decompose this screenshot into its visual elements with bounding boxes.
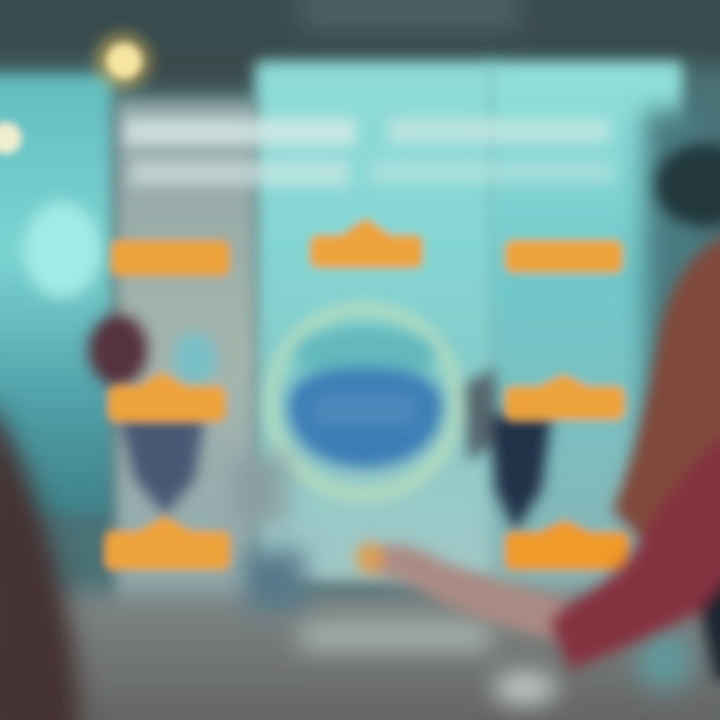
dark figure: left person xyxy=(88,314,217,515)
floor xyxy=(0,592,720,720)
right wall shadow xyxy=(645,110,705,510)
left hand blur xyxy=(232,455,305,610)
pill: top centre xyxy=(310,218,423,268)
panel: left grey xyxy=(116,100,256,610)
pill: middle right xyxy=(505,374,625,420)
dark figure: right person xyxy=(462,368,552,532)
pill: bottom left xyxy=(105,516,231,570)
top dark band xyxy=(0,0,720,90)
pill: top left xyxy=(111,240,230,276)
heading: blurred title lines xyxy=(124,118,615,186)
icon: yellow light top xyxy=(95,33,151,89)
foreground hand xyxy=(356,542,570,640)
pill: bottom right xyxy=(505,520,629,570)
icon: blue centre badge xyxy=(288,368,442,468)
foreground right person xyxy=(550,143,720,680)
orange pills xyxy=(105,218,629,570)
floor highlights xyxy=(300,622,693,704)
panel: left teal xyxy=(0,75,112,515)
foreground left person xyxy=(0,395,80,720)
panel: centre teal xyxy=(256,62,494,582)
pill: middle left xyxy=(108,372,226,422)
pill: top right xyxy=(505,240,623,273)
teal cap above badge xyxy=(295,327,435,383)
panel: right teal xyxy=(488,62,682,602)
icon: left light xyxy=(0,123,21,153)
icon: centre ring xyxy=(271,309,457,495)
